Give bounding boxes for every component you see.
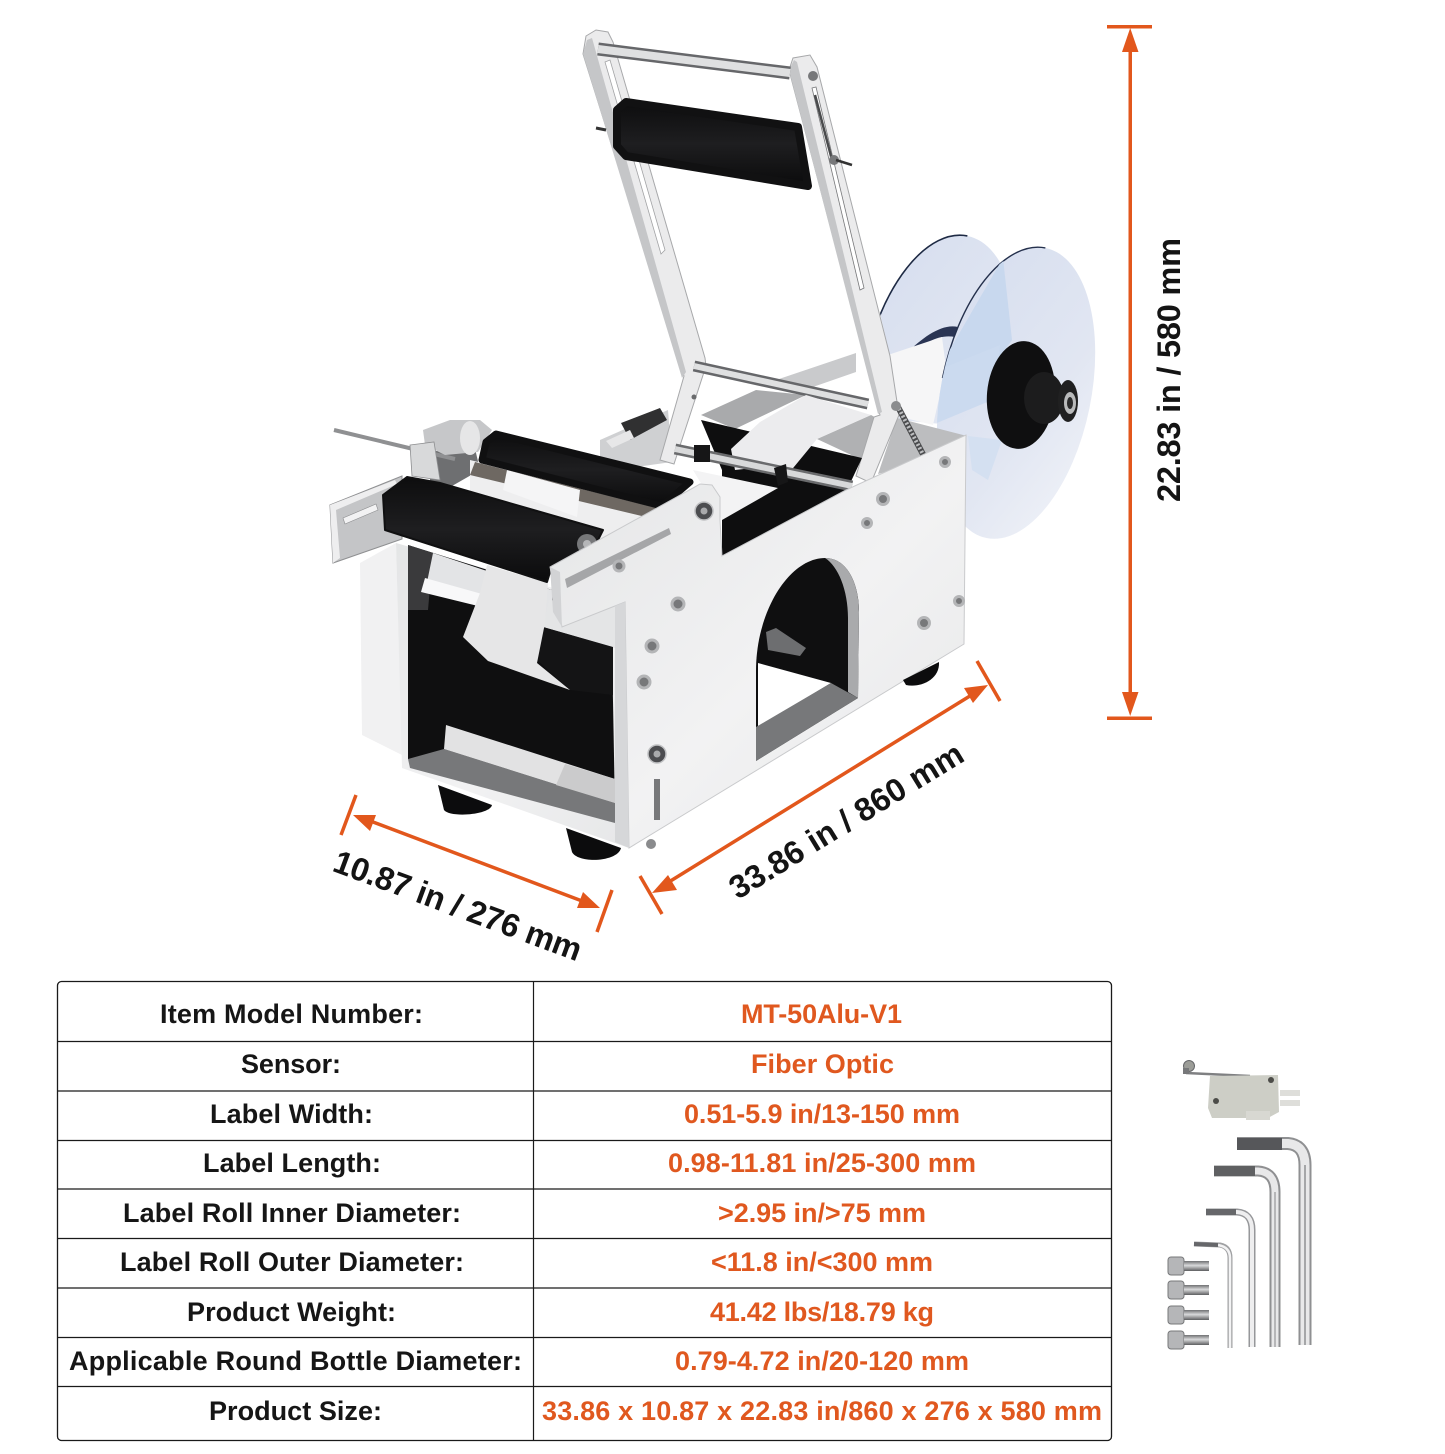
back roller bbox=[482, 434, 690, 506]
row: label length: Label Length: bbox=[203, 1148, 381, 1178]
row: label length: 0.98-11.81 in/25-300 mm bbox=[668, 1148, 976, 1178]
label roll holder discs bbox=[880, 234, 1096, 539]
row: label width: Label Width: bbox=[210, 1099, 373, 1129]
left bracket plate bbox=[330, 476, 402, 563]
white rear housing bbox=[360, 543, 402, 755]
row: sensor: Sensor: bbox=[241, 1049, 341, 1079]
tension spring bbox=[891, 401, 961, 518]
rear deck rails bbox=[600, 353, 967, 474]
row: outer diameter: <11.8 in/<300 mm bbox=[711, 1247, 933, 1277]
row: weight: Product Weight: bbox=[187, 1297, 396, 1327]
row: weight: 41.42 lbs/18.79 kg bbox=[710, 1297, 934, 1327]
row: model: MT-50Alu-V1 bbox=[741, 999, 902, 1029]
width label: 10.87 in / 276 mm bbox=[329, 843, 587, 968]
front frame bbox=[396, 543, 629, 848]
row: inner diameter: Label Roll Inner Diameter: bbox=[123, 1198, 461, 1228]
icon: hex keys bbox=[1194, 1144, 1305, 1348]
panel bolts and bearings bbox=[614, 458, 964, 763]
row: inner diameter: >2.95 in/>75 mm bbox=[718, 1198, 926, 1228]
area between rollers with label bbox=[470, 460, 700, 560]
pivot arm and side rod bbox=[334, 420, 492, 490]
main side panel with arch bbox=[550, 435, 966, 848]
middle rod bbox=[694, 366, 868, 404]
width dimension arrow bbox=[341, 795, 612, 932]
row: model: Item Model Number: bbox=[160, 999, 423, 1029]
front roller bbox=[383, 477, 603, 582]
row: bottle diameter bbox=[69, 1346, 969, 1376]
row: bottle diameter: 0.79-4.72 in/20-120 mm bbox=[675, 1346, 969, 1376]
row: sensor: Fiber Optic bbox=[751, 1049, 894, 1079]
length dimension arrow bbox=[640, 661, 1000, 914]
right upright arm bbox=[596, 55, 899, 483]
row: label width bbox=[210, 1099, 960, 1129]
row: weight bbox=[187, 1297, 934, 1327]
row: outer diameter: Label Roll Outer Diameter: bbox=[120, 1247, 464, 1277]
height dimension arrow bbox=[1107, 25, 1152, 720]
left upright arm bbox=[583, 30, 706, 464]
accessories bbox=[1168, 1060, 1305, 1349]
row: inner diameter bbox=[123, 1198, 926, 1228]
row: outer diameter bbox=[120, 1247, 933, 1277]
icon: screws bbox=[1168, 1257, 1209, 1349]
upper roller bbox=[617, 102, 808, 186]
height label: 22.83 in / 580 mm bbox=[1151, 238, 1187, 502]
product photo: labeling machine bbox=[330, 30, 1119, 860]
specification table bbox=[58, 982, 1112, 1440]
spool hub bbox=[982, 338, 1078, 452]
rubber feet bbox=[438, 662, 939, 860]
row: sensor bbox=[241, 1049, 894, 1079]
black rear opening and label tape bbox=[693, 395, 871, 556]
row: product size bbox=[209, 1396, 1102, 1426]
row: model bbox=[160, 999, 902, 1029]
lower black roller bbox=[535, 627, 613, 695]
row: product size: Product Size: bbox=[209, 1396, 382, 1426]
row: label length bbox=[203, 1148, 976, 1178]
row: product size: 33.86 x 10.87 x 22.83 in/860 x 276 x 580 mm bbox=[542, 1396, 1102, 1426]
hanging label strip bbox=[463, 565, 570, 690]
row: label width: 0.51-5.9 in/13-150 mm bbox=[684, 1099, 960, 1129]
guide rod with clips bbox=[675, 445, 852, 486]
top rod bbox=[598, 49, 790, 73]
icon: micro switch bbox=[1183, 1060, 1300, 1120]
length label: 33.86 in / 860 mm bbox=[723, 735, 970, 906]
row: bottle diameter: Applicable Round Bottle Diameter: bbox=[69, 1346, 522, 1376]
